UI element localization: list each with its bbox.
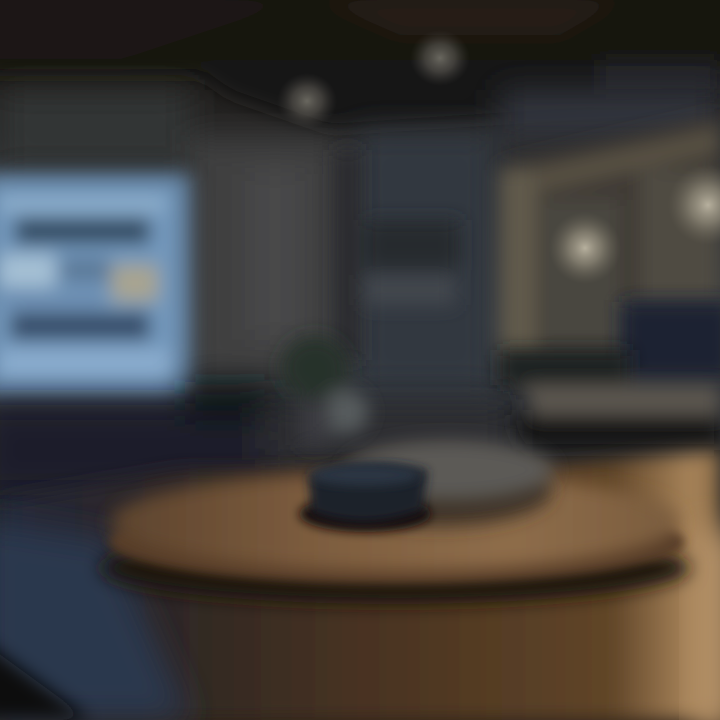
round table <box>100 472 690 604</box>
dark bowl <box>299 464 431 532</box>
wall lamp left <box>549 212 621 284</box>
wall shelf panel <box>335 150 460 360</box>
ceiling with dark beams <box>0 0 720 130</box>
left wall screen <box>0 172 192 398</box>
floor <box>0 450 720 720</box>
dark corner <box>0 640 90 720</box>
wall lamp right <box>668 165 720 245</box>
table edge <box>109 500 685 584</box>
blue floor zone <box>0 520 190 720</box>
wall stone texture <box>0 90 720 390</box>
plate <box>328 440 554 526</box>
right alcove <box>500 115 720 450</box>
table shadow <box>100 532 690 604</box>
bright floor reflection <box>695 530 720 720</box>
plant <box>281 336 369 445</box>
counter <box>500 350 720 450</box>
ceiling spotlights <box>277 30 470 129</box>
dark navy screen <box>622 302 720 378</box>
table top <box>110 472 680 572</box>
lower wall shadows <box>0 385 510 495</box>
